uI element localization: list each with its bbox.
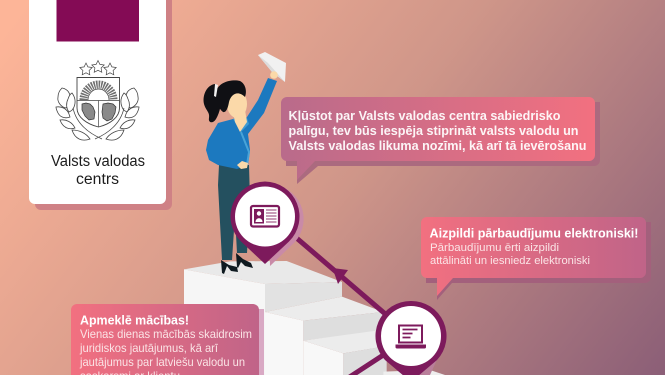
- left leg and right leg: [218, 165, 250, 260]
- icon: id card: [251, 206, 279, 226]
- callout: become a public assistant: Kļūstot par Valsts valodas centra sabiedrisko: [288, 108, 561, 123]
- figure: woman holding paper: [204, 52, 286, 274]
- callout: attend training: Apmeklē mācības!: [80, 314, 189, 328]
- shirt: [206, 78, 277, 169]
- pin: ID card step: [230, 182, 304, 266]
- bookmark tab: [56, 0, 139, 42]
- callout: attend training: [71, 304, 264, 375]
- callout: become a public assistant: palīgu, tev būs iespēja stiprināt valsts valodu un: [288, 123, 579, 138]
- organisation name: Valsts valodas: [51, 153, 145, 170]
- staircase: [184, 261, 460, 375]
- icon: laptop: [396, 326, 426, 348]
- callout: complete tests electronically: Pārbaudījumu ērti aizpildi: [430, 242, 559, 254]
- callout: complete tests electronically: attālināti un iesniedz elektroniski: [430, 255, 590, 267]
- callout: complete tests electronically: [421, 217, 651, 300]
- organisation name: [51, 153, 145, 188]
- hair: [216, 80, 246, 112]
- icon: coat of arms: [56, 60, 139, 140]
- callout: attend training: juridiskos jautājumus, kā arī: [79, 341, 219, 355]
- callout: become a public assistant: Valsts valodas likuma nozīmi, kā arī tā ievērošanu: [288, 138, 586, 153]
- callout: attend training: Vienas dienas mācībās skaidrosim: [80, 327, 252, 341]
- callout: complete tests electronically: Aizpildi pārbaudījumu elektroniski!: [430, 226, 638, 240]
- callout: attend training: jautājumus par latviešu valodu un: [79, 355, 245, 369]
- organisation name: centrs: [76, 171, 119, 188]
- path arrows between steps: [265, 211, 411, 375]
- neck and face: [232, 108, 247, 132]
- shoes: [221, 260, 238, 274]
- hand on hip: [237, 161, 248, 169]
- raised hand: [270, 71, 278, 79]
- paper: [258, 52, 286, 82]
- pin: laptop step: [375, 301, 447, 375]
- logo card: [29, 0, 172, 210]
- ponytail: [204, 84, 221, 122]
- callout: become a public assistant: [281, 97, 600, 184]
- arrowhead: [332, 268, 348, 284]
